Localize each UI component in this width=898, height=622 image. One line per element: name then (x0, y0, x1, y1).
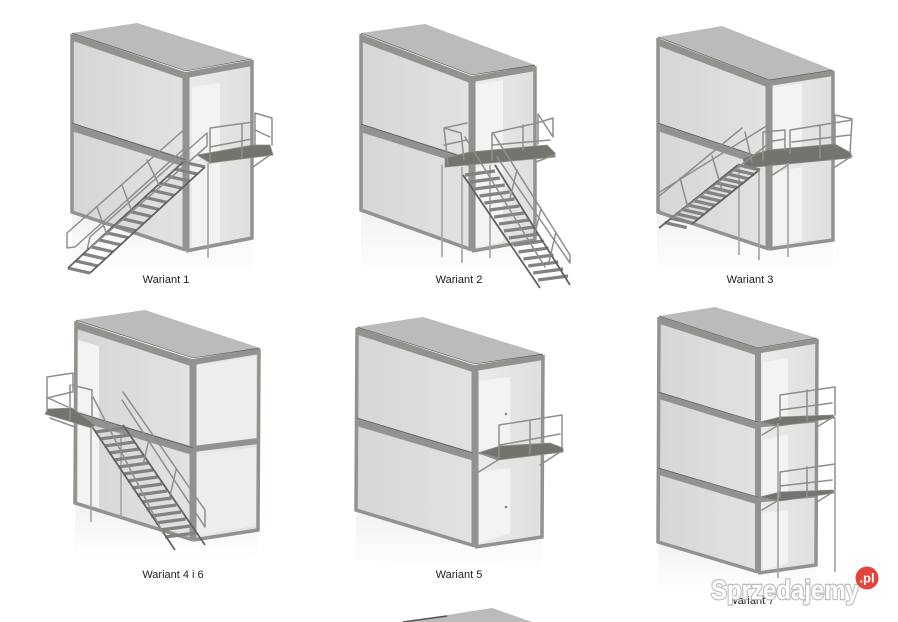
platform and rails (739, 115, 852, 260)
label: Wariant 7: Wariant 7 (728, 595, 774, 607)
watermark: Sprzedajemy (711, 575, 859, 605)
building 1 (72, 23, 252, 251)
label: Wariant 1: Wariant 1 (143, 274, 189, 286)
staircase (93, 392, 205, 550)
lower platform and rails (760, 464, 835, 510)
staircase (658, 125, 768, 228)
variant 8 roof, cropped (403, 608, 532, 622)
building 4 (75, 310, 260, 540)
staircase (463, 133, 570, 288)
support posts (778, 418, 835, 578)
platform and rails (197, 113, 273, 258)
platform and rails (45, 373, 121, 522)
variant 7 (658, 307, 835, 590)
label: Wariant 5: Wariant 5 (436, 569, 482, 581)
variant 4 i 6 (45, 310, 260, 558)
badge .pl: .pl (859, 570, 875, 586)
label: Wariant 2: Wariant 2 (436, 274, 482, 286)
platform and rails (442, 114, 555, 263)
badge .pl (856, 566, 878, 590)
upper platform and rails (760, 387, 835, 435)
variant 2 (361, 24, 570, 288)
building 3 (658, 26, 833, 249)
staircase (67, 127, 207, 273)
label: Wariant 3: Wariant 3 (727, 274, 773, 286)
building 5 (356, 317, 543, 547)
platform and rails (477, 415, 563, 473)
variant 1 (67, 23, 273, 275)
building 2 (361, 24, 535, 251)
variant 3 (657, 26, 852, 275)
variant 5 (356, 317, 563, 570)
building 7 (658, 307, 817, 573)
label: Wariant 4 i 6: Wariant 4 i 6 (142, 569, 204, 581)
